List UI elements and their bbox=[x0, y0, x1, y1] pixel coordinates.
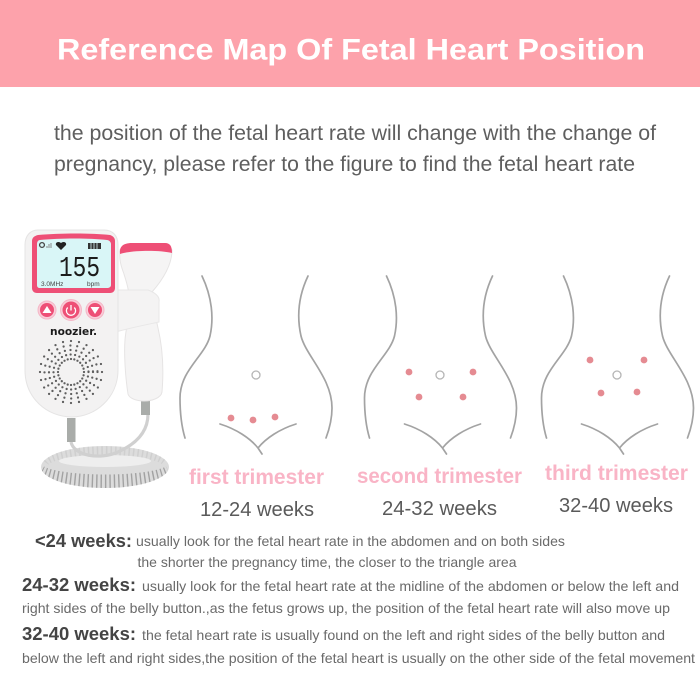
notes: 32-40 weeks: the fetal heart rate is usually found on the left and right sides of the belly button and bbox=[142, 627, 665, 643]
notes: 24-32 weeks: usually look for the fetal heart rate at the midline of the abdomen or below the left and bbox=[142, 578, 679, 594]
notes: under 24 weeks bbox=[35, 531, 565, 570]
body outline bbox=[542, 276, 694, 454]
diagram: second trimester bbox=[357, 276, 522, 520]
title: Reference Map Of Fetal Heart Position bbox=[57, 34, 645, 66]
heart position dots bbox=[587, 357, 647, 396]
label: first trimester bbox=[189, 466, 324, 489]
navel bbox=[613, 371, 621, 379]
notes: under 24 weeks: the shorter the pregnancy time, the closer to the triangle area bbox=[138, 554, 517, 570]
device body bbox=[25, 230, 118, 417]
brand: noozier. bbox=[50, 326, 97, 338]
diagram: third trimester bbox=[542, 276, 694, 517]
notes: 32-40 weeks: 32-40 weeks: bbox=[22, 624, 136, 644]
probe bbox=[120, 243, 172, 401]
speaker grille bbox=[40, 341, 102, 403]
strap bbox=[112, 290, 159, 333]
diagram: first trimester bbox=[180, 276, 332, 521]
notes: under 24 weeks: usually look for the fetal heart rate in the abdomen and on both sides bbox=[136, 533, 565, 549]
screen bbox=[32, 234, 115, 293]
weeks: 24-32 weeks bbox=[382, 498, 497, 520]
screen: 155 bbox=[59, 252, 100, 285]
intro text: pregnancy, please refer to the figure to find the fetal heart rate bbox=[54, 153, 635, 176]
notes: 24-32 weeks: right sides of the belly button.,as the fetus grows up, the position of the fetal heart rate will also move up bbox=[22, 600, 670, 616]
weeks: 32-40 weeks bbox=[559, 495, 673, 517]
coiled cable bbox=[40, 401, 170, 488]
notes: 24-32 weeks: 24-32 weeks: bbox=[22, 575, 136, 595]
intro text bbox=[54, 122, 656, 176]
notes: 24-32 weeks bbox=[22, 575, 679, 616]
navel bbox=[252, 371, 260, 379]
notes: 32-40 weeks: below the left and right sides,the position of the fetal heart is usually on the other side of the fetal movement bbox=[22, 650, 695, 666]
control buttons bbox=[38, 300, 104, 320]
notes: 32-40 weeks bbox=[22, 624, 695, 666]
screen: 3.0MHz bbox=[41, 281, 63, 288]
label: third trimester bbox=[545, 462, 688, 485]
body outline bbox=[364, 276, 516, 454]
heart position dots bbox=[228, 414, 278, 423]
intro text: the position of the fetal heart rate will change with the change of bbox=[54, 122, 656, 145]
header banner bbox=[0, 0, 700, 87]
screen: bpm bbox=[87, 281, 100, 288]
device: fetal doppler bbox=[25, 230, 172, 488]
heart position dots bbox=[406, 369, 476, 400]
notes: under 24 weeks: <24 weeks: bbox=[35, 531, 132, 551]
body outline bbox=[180, 276, 332, 454]
label: second trimester bbox=[357, 465, 522, 488]
navel bbox=[436, 371, 444, 379]
weeks: 12-24 weeks bbox=[200, 499, 314, 521]
